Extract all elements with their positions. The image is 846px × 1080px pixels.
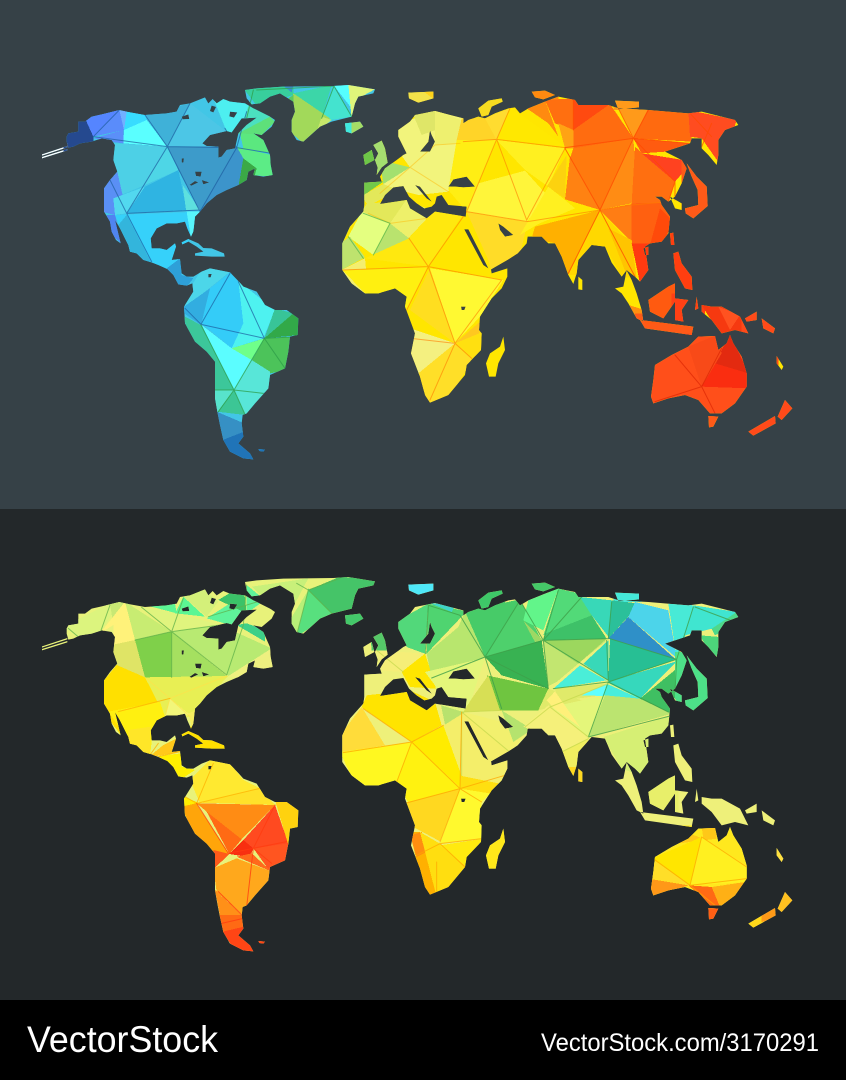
panel: black footer band [0, 1000, 846, 1080]
panel: lower dark background [0, 509, 846, 1000]
footer image URL text: VectorStock.com/3170291 [541, 1029, 819, 1057]
upper map: Europe, Africa, Asia, Oceania [335, 80, 805, 440]
upper Americas facet lines [93, 103, 272, 338]
lower map: Europe, Africa, Asia, Oceania [335, 572, 805, 932]
lower Australia facets [648, 825, 748, 909]
lower Russia and central Asia facets [426, 614, 485, 671]
Africa facets [365, 208, 467, 267]
Russia and east Asia facets [527, 100, 558, 137]
upper world map: cool to warm, west to east [30, 75, 805, 465]
lower Americas facet lines [68, 578, 340, 677]
lower world map: warm to cool, south to north [30, 570, 805, 960]
Middle East and central Asia facets [467, 212, 528, 272]
lower map: Americas and Greenland [30, 570, 380, 960]
lower eastern facet lines [426, 590, 735, 737]
footer logo text: VectorStock [27, 1019, 218, 1060]
Greenland facets [245, 86, 294, 104]
upper eastern facet lines [342, 108, 668, 400]
upper map: Americas and Greenland [30, 75, 380, 465]
Europe facets [395, 109, 465, 192]
panel: upper slate background [0, 0, 846, 509]
lower Africa facets [362, 690, 442, 742]
Australia facets [648, 333, 748, 417]
South America facets [185, 268, 230, 306]
South America facets [190, 760, 260, 803]
